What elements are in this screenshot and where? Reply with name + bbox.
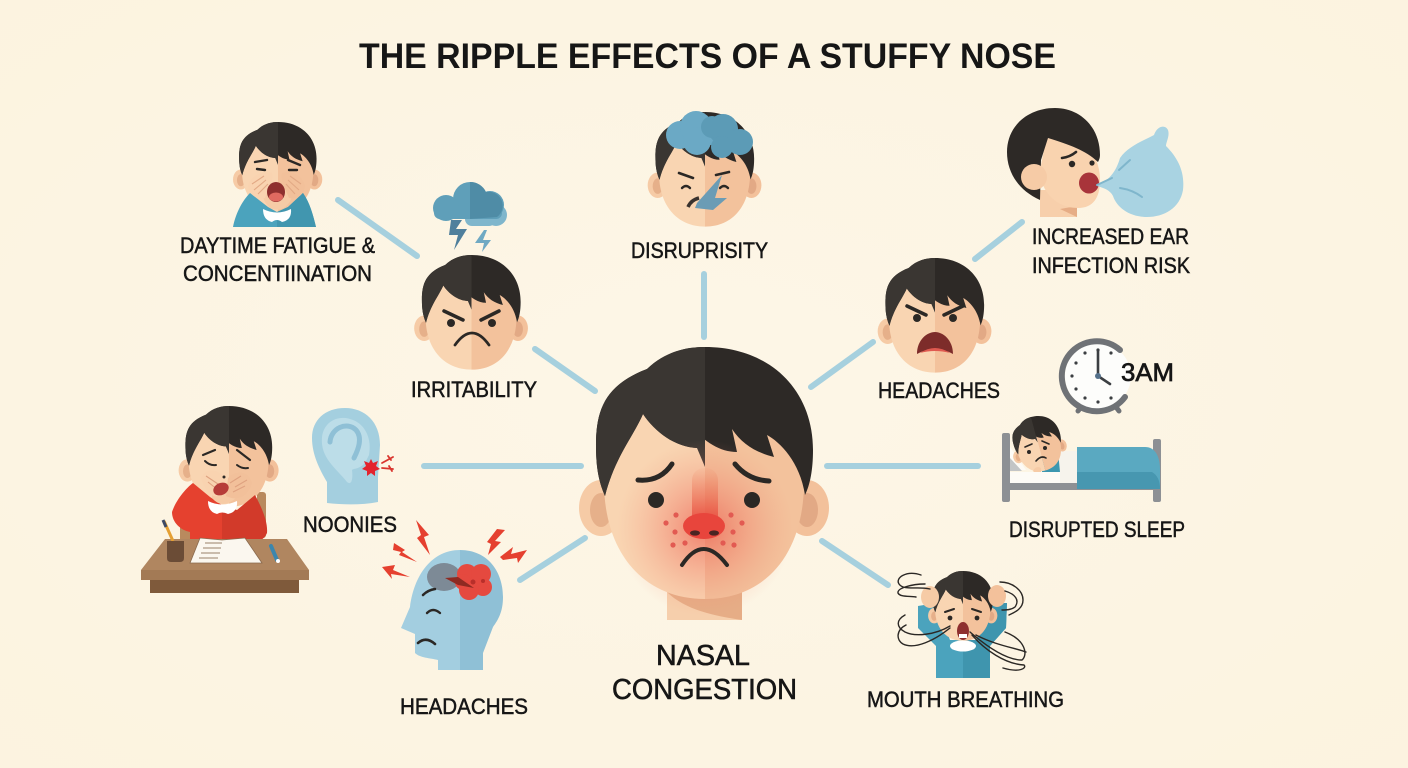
label: daytime fatigue and concentration: CONCENTIINATION — [183, 261, 372, 286]
panel: irritability — [411, 182, 537, 402]
icon: upset face with open mouth — [878, 258, 991, 373]
label: daytime fatigue and concentration: DAYTIME FATIGUE & — [180, 233, 375, 258]
icon: alarm clock — [1062, 341, 1131, 411]
panel: disrupted sleep — [1002, 341, 1185, 542]
panel: noonies — [141, 406, 397, 593]
icon: child at desk — [141, 406, 309, 593]
label: increased ear infection risk — [1032, 224, 1190, 278]
label: noonies: NOONIES — [303, 512, 397, 537]
label: increased ear infection risk: INCREASED EAR — [1032, 224, 1189, 249]
label: headaches: HEADACHES — [878, 378, 1000, 403]
label: 3 AM: 3AM — [1121, 359, 1174, 387]
icon: storm cloud — [433, 182, 507, 252]
arrow: to irritability — [535, 349, 595, 391]
title: THE RIPPLE EFFECTS OF A STUFFY NOSE — [359, 37, 1056, 76]
arrow: to mouth breathing — [822, 541, 888, 585]
label: nasal congestion — [612, 640, 797, 706]
arrow: to noonies — [424, 463, 581, 469]
panel: headaches right — [878, 258, 1000, 403]
label: daytime fatigue and concentration — [180, 233, 375, 286]
icon: yawning child — [233, 122, 322, 227]
label: nasal congestion: NASAL — [656, 640, 750, 672]
label: disrupted sleep: DISRUPTED SLEEP — [1009, 517, 1185, 542]
icon: angry face — [414, 255, 528, 370]
arrow: to ear infection risk — [975, 222, 1022, 259]
panel: daytime fatigue — [180, 122, 375, 286]
arrow: to disruprisity — [701, 274, 707, 337]
panel: increased ear infection risk — [1007, 108, 1190, 278]
panel: nasal congestion — [579, 347, 829, 706]
panel: headaches bottom — [382, 520, 528, 719]
label: irritability: IRRITABILITY — [411, 377, 537, 402]
icon: child blowing air — [1007, 108, 1183, 217]
icon: child in bed — [1002, 410, 1161, 502]
panel: disruprisity — [631, 111, 768, 263]
arrow: to disrupted sleep — [827, 463, 978, 469]
panel: mouth breathing — [867, 571, 1064, 712]
arrow: to headaches right — [811, 342, 873, 387]
arrow: to daytime fatigue — [338, 200, 417, 256]
label: headaches: HEADACHES — [400, 694, 528, 719]
label: disruprisity: DISRUPRISITY — [631, 238, 768, 263]
infographic: ripple effects of a stuffy nose — [141, 43, 1190, 714]
icon: congested central face — [579, 347, 829, 620]
label: nasal congestion: CONGESTION — [612, 674, 797, 706]
icon: head with inflamed brain — [382, 520, 527, 670]
icon: head under cloud with lightning — [648, 111, 761, 227]
arrow: to headaches bottom — [520, 538, 585, 580]
icon: infected ear — [312, 408, 393, 504]
label: increased ear infection risk: INFECTION RISK — [1032, 253, 1190, 278]
icon: child breathing through mouth — [898, 571, 1026, 678]
label: mouth breathing: MOUTH BREATHING — [867, 687, 1064, 712]
